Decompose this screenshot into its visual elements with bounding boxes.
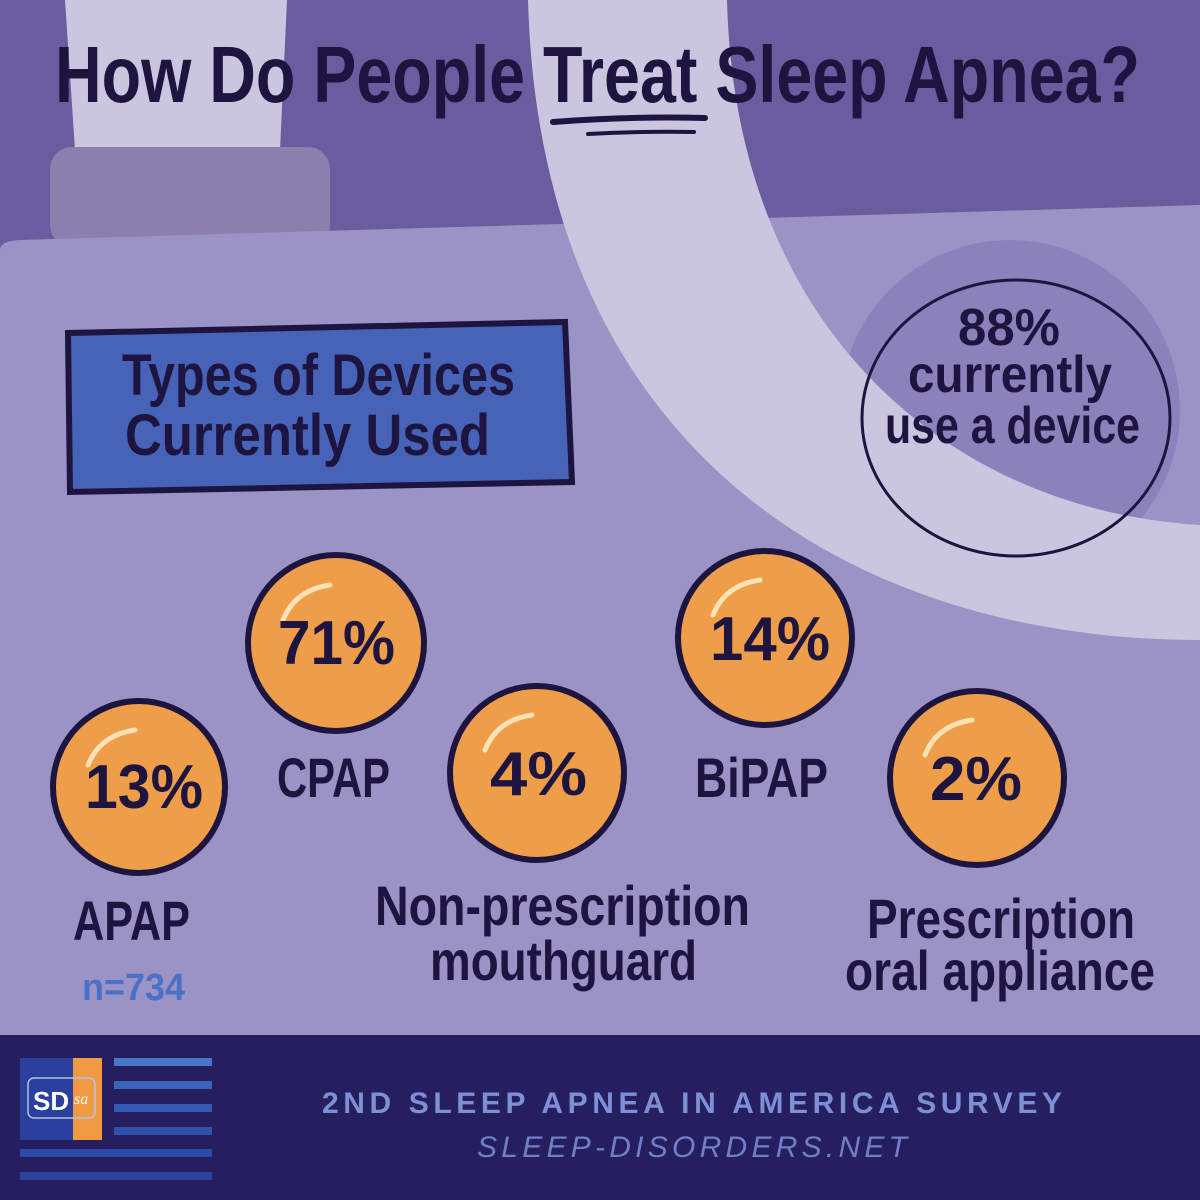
connector: [50, 147, 330, 247]
stat: Non-prescription mouthguard 4%: Non-prescription: [375, 874, 750, 937]
callout circle: 88% currently use a device: 88%: [958, 299, 1060, 357]
heading box: Types of Devices Currently Used: Types of Devices: [122, 343, 515, 408]
stat: Prescription oral appliance 2%: [845, 691, 1155, 1002]
stat: CPAP 71%: 71%: [278, 609, 395, 678]
callout circle: 88% currently use a device: use a device: [885, 397, 1140, 455]
stat: Non-prescription mouthguard 4%: [375, 686, 750, 992]
callout circle: 88% currently use a device: [862, 280, 1170, 556]
stat: APAP 13%: 13%: [85, 753, 203, 822]
footer: [0, 1035, 1200, 1200]
stat: APAP 13%: [53, 701, 225, 1009]
footer: SLEEP-DISORDERS.NET: [477, 1131, 910, 1164]
logo: [20, 1058, 212, 1180]
logo: sa: [74, 1091, 88, 1108]
stat: APAP 13%: n=734: [82, 967, 185, 1009]
stat: Prescription oral appliance 2%: 2%: [930, 745, 1022, 814]
left tube: [65, 0, 287, 150]
device body: [0, 205, 1200, 1040]
stat: BiPAP 14%: BiPAP: [695, 746, 828, 809]
logo: SD: [33, 1086, 69, 1116]
darker region in circle: [840, 240, 1180, 580]
footer text: 2ND SLEEP APNEA IN AMERICA SURVEY: [322, 1087, 1062, 1120]
callout circle: 88% currently use a device: currently: [908, 346, 1112, 404]
stat: Non-prescription mouthguard 4%: mouthguard: [430, 929, 697, 992]
stat: Prescription oral appliance 2%: Prescription: [867, 887, 1135, 950]
stat: BiPAP 14%: [678, 551, 852, 809]
heading box: Types of Devices Currently Used: Currently Used: [125, 403, 490, 468]
stat: BiPAP 14%: 14%: [710, 605, 830, 674]
heading box: Types of Devices Currently Used: [68, 322, 572, 492]
stat: APAP 13%: APAP: [73, 889, 190, 952]
stat: Non-prescription mouthguard 4%: 4%: [490, 740, 587, 809]
stat: CPAP 71%: CPAP: [277, 746, 390, 809]
stat: CPAP 71%: [248, 555, 424, 809]
big tube: [528, 0, 1200, 640]
